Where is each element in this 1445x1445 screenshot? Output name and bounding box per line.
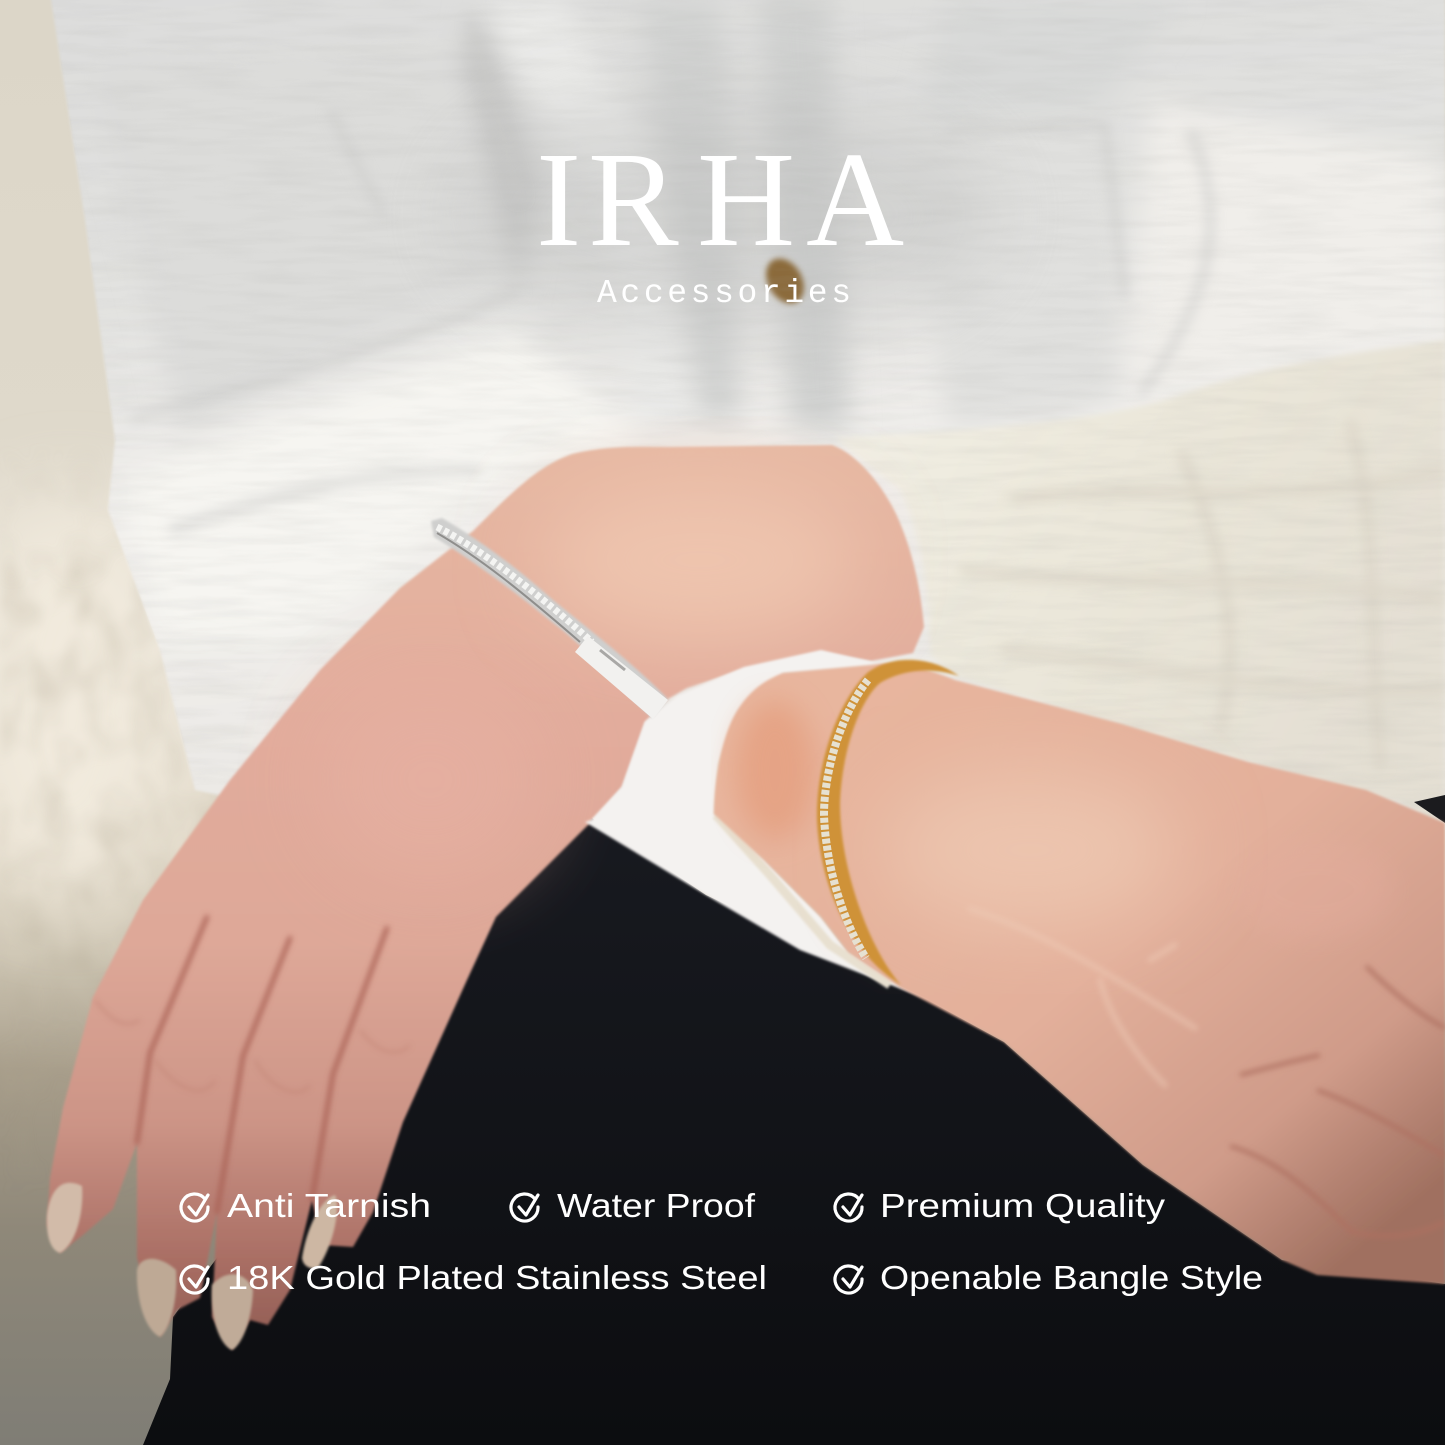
feature: 18K Gold Plated Stainless Steel: 18K Gold Plated Stainless Steel: [227, 1259, 767, 1296]
photo: white linen shirt: [51, 0, 1445, 796]
subtitle: Accessories: Accessories: [597, 275, 851, 312]
fingernails: [47, 1183, 337, 1350]
icon: check: [835, 1266, 862, 1293]
icon: check: [181, 1266, 208, 1293]
linen texture: [185, 278, 1279, 740]
knuckle creases: [95, 1000, 410, 1092]
shirt crease lines: [130, 20, 1210, 530]
finger gaps: [137, 917, 387, 1212]
feature: Premium Quality: Premium Quality: [880, 1187, 1166, 1224]
feature: Water Proof: Water Proof: [557, 1187, 756, 1224]
gold bangle: [817, 660, 959, 985]
sleeve wrinkles: [960, 420, 1445, 770]
icon: check: [511, 1194, 538, 1221]
icon: check: [181, 1194, 208, 1221]
hand creases: [1230, 966, 1445, 1236]
silver bangle: [431, 518, 668, 719]
icon: check: [835, 1194, 862, 1221]
photo: dark trousers: [143, 795, 1445, 1445]
feature: Anti Tarnish: [181, 1187, 431, 1224]
photo: right forearm and hand: [714, 664, 1445, 1284]
shirt folds: [163, 4, 1445, 484]
feature: Openable Bangle Style: Openable Bangle Style: [880, 1259, 1263, 1296]
wrist highlight: [540, 480, 860, 640]
logo: IRHA: IRHA: [536, 125, 904, 275]
feature: Anti Tarnish: Anti Tarnish: [227, 1187, 431, 1224]
photo: left hand and wrist: [47, 445, 924, 1350]
photo: white inner cuff: [585, 650, 930, 1000]
shirt button: [758, 252, 812, 310]
pale veins: [970, 909, 1195, 1085]
photo: right sleeve: [835, 340, 1445, 830]
